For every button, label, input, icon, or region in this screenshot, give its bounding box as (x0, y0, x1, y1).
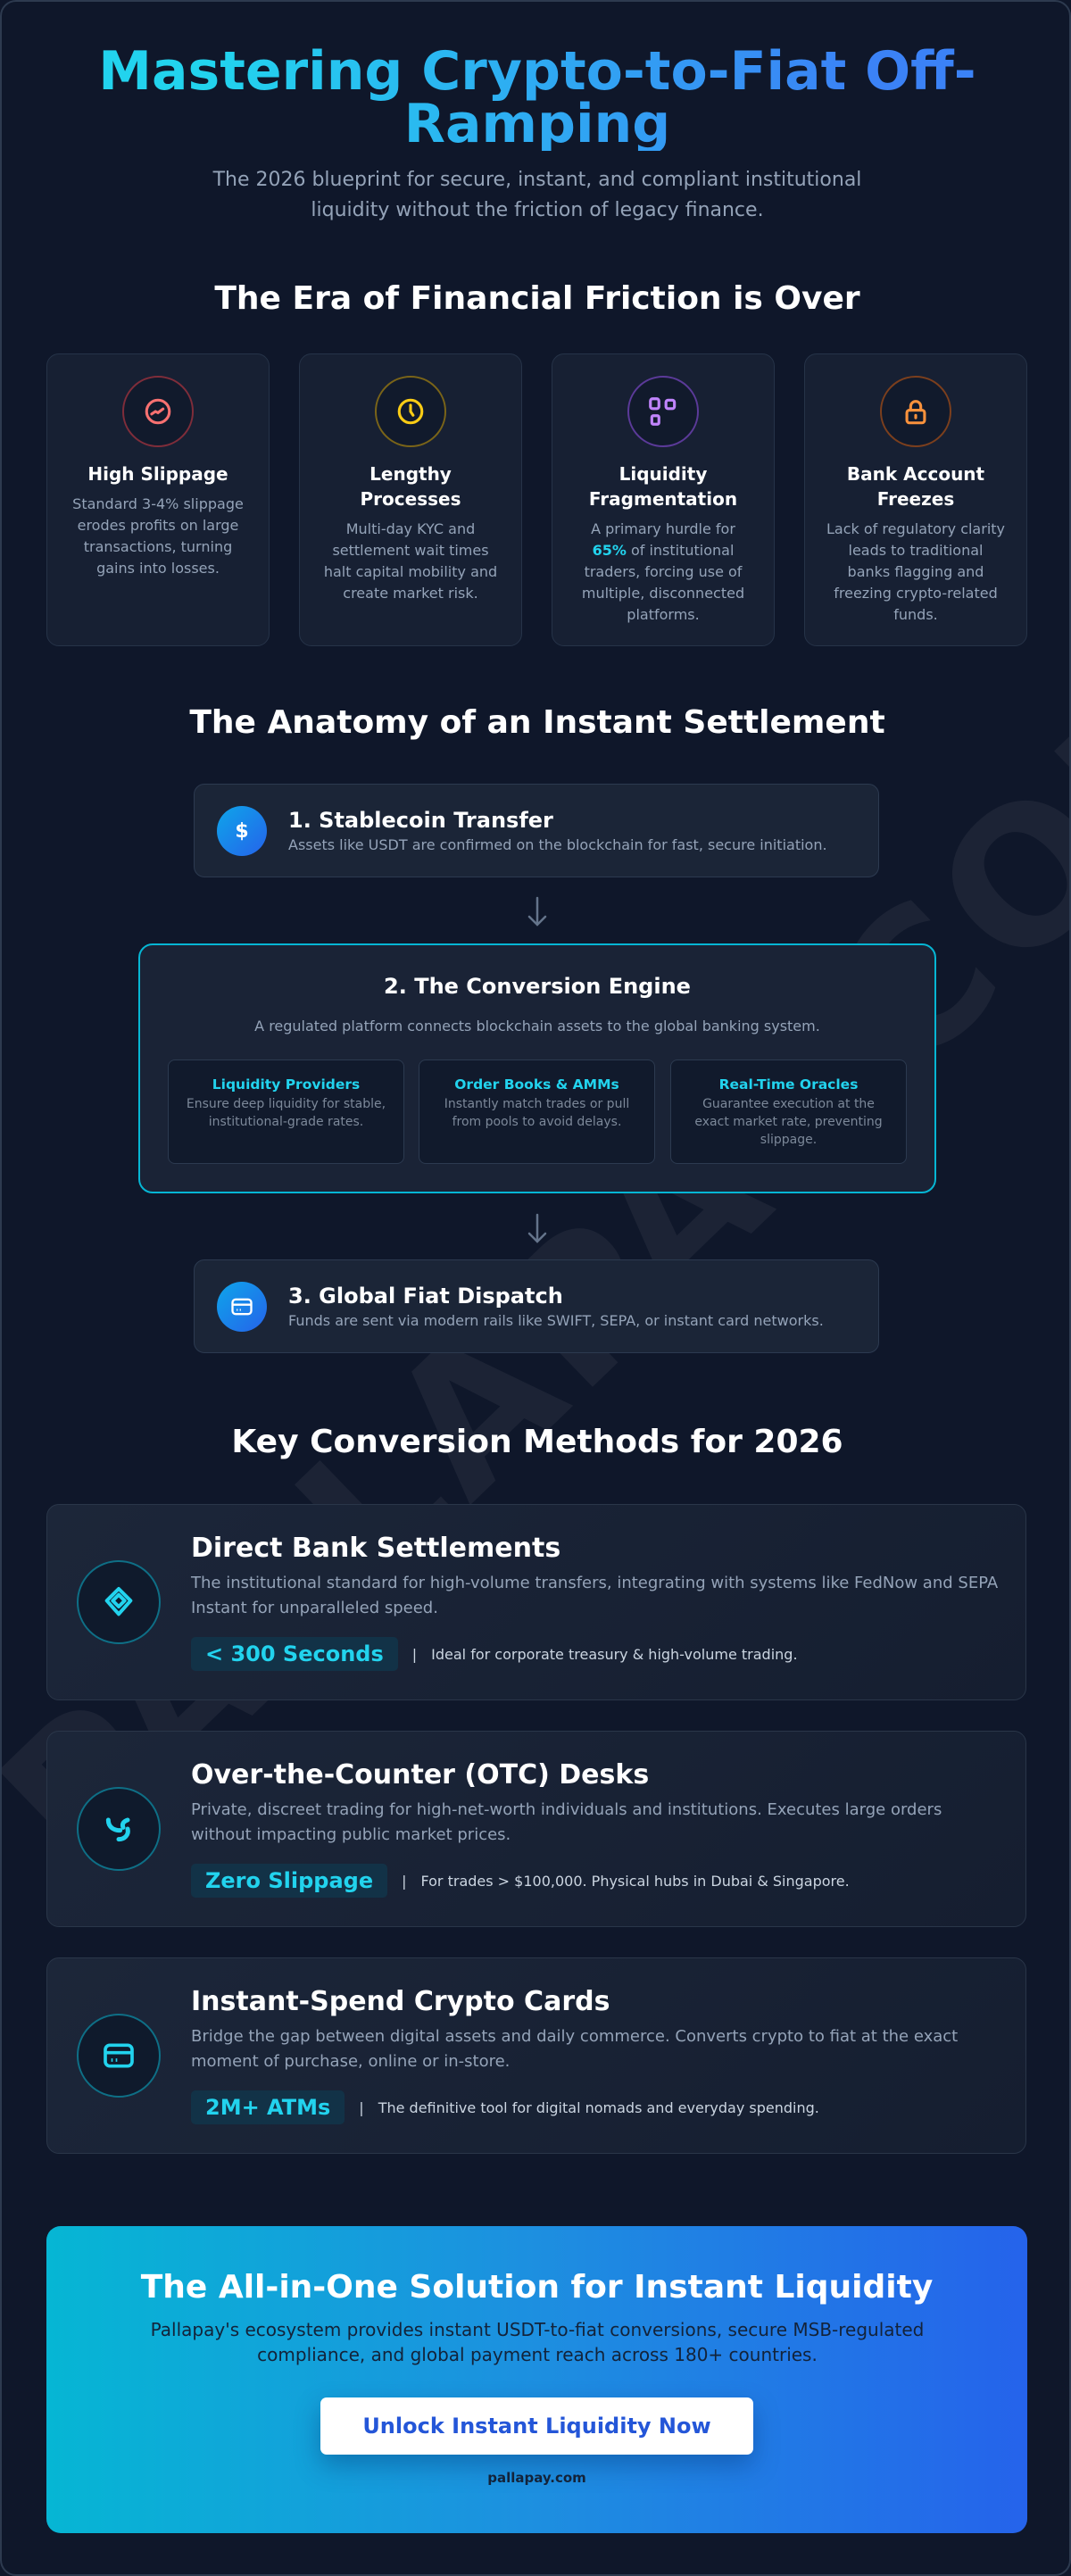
icon: lock (880, 376, 951, 447)
panel: lengthy processes: create market risk. (343, 585, 478, 602)
method card: OTC: Private, discreet trading for high-net-worth individuals and institutions. Executes large orders without impacting public market prices. (191, 1800, 942, 1844)
step 3: fiat dispatch: 3. Global Fiat Dispatch (288, 1284, 563, 1309)
sub: liquidity providers: Liquidity Providers (212, 1076, 360, 1093)
panel: high slippage: High Slippage (87, 463, 228, 485)
heading: era of friction: The Era of Financial Friction is Over (214, 280, 860, 317)
sub: oracles: exact market rate, preventing (694, 1115, 883, 1129)
sub: liquidity providers (168, 1059, 404, 1164)
method card: direct bank (46, 1504, 1026, 1700)
step 3: fiat dispatch (194, 1259, 879, 1353)
sub: order books: from pools to avoid delays. (452, 1115, 621, 1129)
method card: direct bank: | Ideal for corporate treasury & high-volume trading. (412, 1646, 798, 1662)
sub: order books: Instantly match trades or pull (444, 1097, 629, 1111)
step 1: stablecoin transfer: 1. Stablecoin Transfer (288, 808, 553, 833)
panel: bank account freezes: leads to traditional (848, 542, 983, 559)
panel: lengthy processes: Processes (361, 488, 461, 510)
method card: crypto cards (46, 1957, 1026, 2154)
method card: OTC: | For trades > $100,000. Physical hubs in Dubai & Singapore. (402, 1873, 850, 1889)
sub: oracles: Guarantee execution at the (702, 1097, 875, 1111)
title: Ramping (404, 93, 670, 155)
icon: fragments (627, 376, 699, 447)
panel: bank account freezes: Lack of regulatory clarity (826, 520, 1005, 537)
sub: oracles (670, 1059, 907, 1164)
method card: direct bank: The institutional standard for high-volume transfers, integrating with systems like FedNow and SEPA Instant for unparalleled speed. (191, 1574, 998, 1617)
sub: liquidity providers: Ensure deep liquidity for stable, (187, 1097, 386, 1111)
icon: dollar: $ (235, 819, 249, 843)
sub: order books (419, 1059, 655, 1164)
button (320, 2397, 753, 2455)
arrow (528, 1214, 546, 1243)
title (2, 46, 1071, 151)
panel: lengthy processes: settlement wait times (332, 542, 489, 559)
callout: CTA: The All-in-One Solution for Instant Liquidity (141, 2269, 933, 2306)
icon: diamond (77, 1560, 161, 1644)
method card: crypto cards: | The definitive tool for digital nomads and everyday spending. (359, 2099, 819, 2115)
panel: bank account freezes: banks flagging and (848, 563, 984, 580)
panel: liquidity fragmentation: Liquidity (619, 463, 707, 485)
panel: high slippage: erodes profits on large (78, 517, 238, 534)
heading: anatomy: The Anatomy of an Instant Settlement (189, 704, 885, 741)
panel: high slippage (46, 353, 270, 646)
icon: slippage gauge (122, 376, 194, 447)
panel: bank account freezes: Bank Account (847, 463, 984, 485)
panel: liquidity fragmentation: multiple, disconnected (582, 585, 744, 602)
title: Mastering Crypto-to-Fiat Off- (98, 40, 976, 103)
method card: direct bank: Direct Bank Settlements (191, 1533, 560, 1564)
sub: order books: Order Books & AMMs (454, 1076, 619, 1093)
panel: bank account freezes: funds. (893, 606, 938, 623)
panel: liquidity fragmentation: A primary hurdle for (591, 520, 735, 537)
panel: lengthy processes (299, 353, 522, 646)
sub: oracles: slippage. (760, 1133, 817, 1147)
panel: bank account freezes (804, 353, 1027, 646)
panel: high slippage: transactions, turning (84, 538, 232, 555)
callout: CTA (46, 2226, 1027, 2533)
icon: card (77, 2014, 161, 2098)
icon: dollar (217, 806, 267, 856)
icon: clock (375, 376, 446, 447)
heading: key methods: Key Conversion Methods for 2026 (231, 1424, 843, 1460)
panel: lengthy processes: Lengthy (369, 463, 452, 485)
step 1: stablecoin transfer: Assets like USDT are confirmed on the blockchain for fast, secure initiation. (288, 836, 827, 853)
panel: liquidity fragmentation: traders, forcing use of (585, 563, 742, 580)
icon: card (217, 1282, 267, 1332)
icon: swirl (77, 1787, 161, 1871)
callout: CTA: pallapay.com (487, 2470, 586, 2486)
arrow (528, 896, 546, 927)
panel: high slippage: gains into losses. (96, 560, 220, 577)
method card: direct bank: < 300 Seconds (205, 1641, 384, 1666)
panel: lengthy processes: halt capital mobility and (324, 563, 497, 580)
step 3: fiat dispatch: Funds are sent via modern rails like SWIFT, SEPA, or instant card networks. (288, 1312, 824, 1329)
sub: liquidity providers: institutional-grade rates. (209, 1115, 363, 1129)
panel: liquidity fragmentation: Fragmentation (589, 488, 737, 510)
step 2: conversion engine: A regulated platform connects blockchain assets to the global banking system. (254, 1018, 820, 1035)
panel: bank account freezes: freezing crypto-related (834, 585, 998, 602)
callout: CTA: Pallapay's ecosystem provides instant USDT-to-fiat conversions, secure MSB-regulated compliance, and global payment reach across 180+ countries. (151, 2319, 924, 2365)
method card: OTC: Zero Slippage (205, 1868, 373, 1893)
subtitle: The 2026 blueprint for secure, instant, and compliant institutional liquidity without the friction of legacy finance. (213, 169, 861, 221)
button: Unlock Instant Liquidity Now (362, 2414, 711, 2439)
method card: crypto cards: 2M+ ATMs (205, 2095, 330, 2120)
method card: crypto cards: Instant-Spend Crypto Cards (191, 1986, 610, 2017)
method card: crypto cards: Bridge the gap between digital assets and daily commerce. Converts crypto to fiat at the exact moment of purchase, online or in-store. (191, 2027, 958, 2071)
panel: liquidity fragmentation: 65% of institutional (593, 542, 734, 559)
sub: oracles: Real-Time Oracles (719, 1076, 858, 1093)
step 2: conversion engine (138, 943, 936, 1193)
method card: OTC: Over-the-Counter (OTC) Desks (191, 1759, 649, 1791)
panel: high slippage: Standard 3-4% slippage (72, 495, 244, 512)
method card: OTC (46, 1731, 1026, 1927)
panel: lengthy processes: Multi-day KYC and (346, 520, 475, 537)
step 1: stablecoin transfer (194, 784, 879, 877)
panel: liquidity fragmentation (552, 353, 775, 646)
panel: bank account freezes: Freezes (877, 488, 954, 510)
panel: liquidity fragmentation: platforms. (627, 606, 700, 623)
step 2: conversion engine: 2. The Conversion Engine (384, 974, 691, 999)
